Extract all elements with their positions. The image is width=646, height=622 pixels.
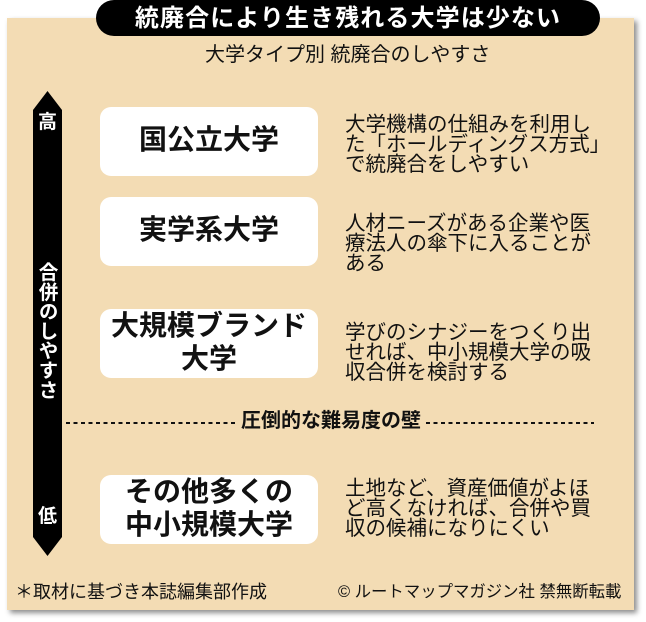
copyright note: © ルートマップマガジン社 禁無断転載 — [338, 583, 621, 601]
arrow: merger likelihood scale — [33, 91, 62, 556]
description: other small and mid-sized universities: ど高くなければ、合併や買 — [345, 497, 591, 520]
description: national and public universities: 大学機構の仕組みを利用し — [345, 113, 591, 136]
description: other small and mid-sized universities: 土地など、資産価値がよほ — [345, 477, 589, 500]
box: large brand universities: 大規模ブランド — [111, 310, 307, 340]
description: practical universities — [345, 212, 591, 275]
arrow label: merger likelihood: 合併のしやすさ — [35, 262, 57, 400]
description: large brand universities — [345, 321, 591, 384]
arrow label: low: 低 — [38, 506, 57, 527]
description: practical universities: ある — [345, 252, 386, 275]
box: large brand universities: 大学 — [181, 342, 237, 374]
subtitle: 大学タイプ別 統廃合のしやすさ — [205, 44, 490, 66]
source note: ＊取材に基づき本誌編集部作成 — [15, 582, 267, 602]
box: other small and mid-sized universities: その他多くの — [125, 476, 293, 506]
arrow label: high: 高 — [38, 112, 57, 133]
box: practical universities — [100, 197, 318, 266]
description: other small and mid-sized universities — [345, 477, 591, 540]
description: national and public universities — [345, 113, 610, 176]
description: large brand universities: せれば、中小規模大学の吸 — [345, 341, 591, 364]
description: national and public universities: で統廃合をしやすい — [345, 153, 529, 176]
description: other small and mid-sized universities: 収の候補になりにくい — [345, 517, 550, 540]
description: national and public universities: た「ホールディングス方式」 — [345, 133, 610, 156]
description: large brand universities: 学びのシナジーをつくり出 — [345, 321, 591, 344]
box: other small and mid-sized universities — [100, 475, 318, 544]
box: other small and mid-sized universities: 中小規模大学 — [125, 508, 293, 540]
box: national and public universities — [100, 107, 318, 176]
box: national and public universities: 国公立大学 — [139, 124, 279, 155]
box: practical universities: 実学系大学 — [139, 214, 279, 245]
description: large brand universities: 収合併を検討する — [345, 361, 509, 384]
description: practical universities: 療法人の傘下に入ることが — [345, 232, 591, 255]
divider label: 圧倒的な難易度の壁 — [241, 410, 421, 432]
description: practical universities: 人材ニーズがある企業や医 — [345, 212, 590, 235]
title banner — [96, 0, 600, 36]
box: large brand universities — [100, 309, 318, 378]
title banner: 統廃合により生き残れる大学は少ない — [135, 5, 561, 32]
